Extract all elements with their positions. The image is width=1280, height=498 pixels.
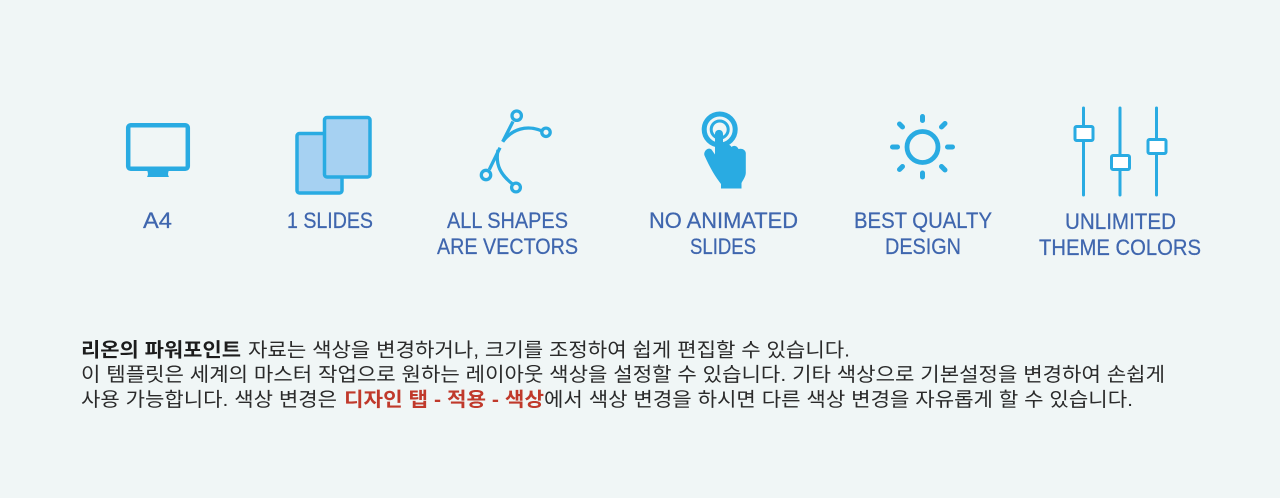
description text block: 디자인 탭 - 적용 - 색상	[344, 389, 544, 411]
description text block: 사용 가능합니다. 색상 변경은	[81, 389, 337, 411]
label: A4: A4	[143, 208, 172, 233]
icon: touch hand	[704, 114, 746, 188]
label: all shapes are vectors: ALL SHAPES	[447, 208, 568, 233]
description text block: 자료는 색상을 변경하거나, 크기를 조정하여 쉽게 편집할 수 있습니다.	[248, 340, 850, 362]
description text block: 에서 색상 변경을 하시면 다른 색상 변경을 자유롭게 할 수 있습니다.	[544, 389, 1133, 411]
label: best quality design: DESIGN	[885, 234, 961, 259]
label: best quality design	[854, 208, 992, 259]
label: best quality design: BEST QUALTY	[854, 208, 992, 233]
label: unlimited theme colors: UNLIMITED	[1065, 209, 1176, 234]
description text block	[81, 340, 1165, 411]
icon: sun	[892, 116, 952, 177]
description text block: 이 템플릿은 세계의 마스터 작업으로 원하는 레이아웃 색상을 설정할 수 있습니다. 기타 색상으로 기본설정을 변경하여 손쉽게	[81, 364, 1165, 386]
label: unlimited theme colors	[1039, 209, 1201, 260]
label: no animated slides	[649, 208, 798, 259]
description text block: 리온의 파워포인트	[81, 340, 241, 362]
icon: slides	[297, 118, 370, 193]
label: all shapes are vectors: ARE VECTORS	[437, 234, 578, 259]
icon: sliders	[1075, 108, 1166, 195]
label: unlimited theme colors: THEME COLORS	[1039, 235, 1201, 260]
label: 1 SLIDES: 1 SLIDES	[287, 208, 373, 233]
icon: vector curves	[481, 111, 550, 192]
label: no animated slides: SLIDES	[690, 234, 756, 259]
label: all shapes are vectors	[437, 208, 578, 259]
label: no animated slides: NO ANIMATED	[649, 208, 798, 233]
icon: monitor	[128, 125, 188, 177]
